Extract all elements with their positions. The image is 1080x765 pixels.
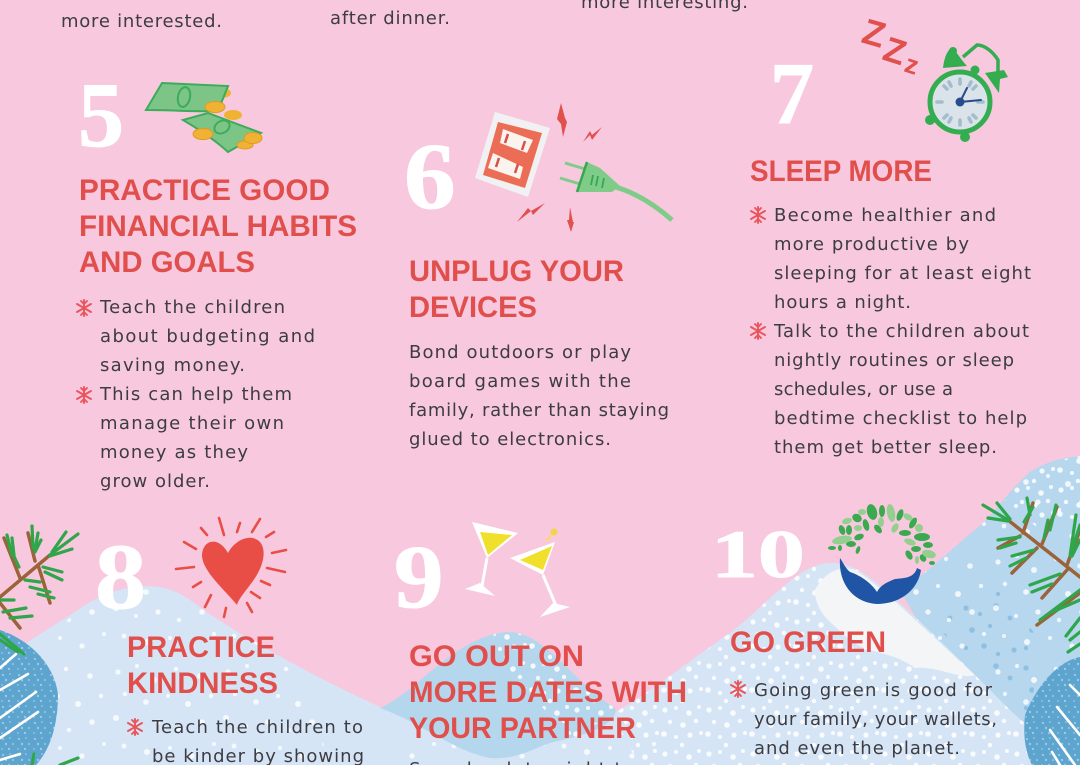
heading: UNPLUG YOUR [409,255,624,288]
bullet list: hours a night. [774,292,911,313]
bullet list: money as they [100,442,248,463]
bullet list: bedtime checklist to help [774,408,1027,429]
bullet list: Become healthier and [774,205,996,226]
heading: PRACTICE [127,631,275,664]
body text [409,342,669,450]
icon: hands and leaves [828,503,937,604]
section 9: dates [394,522,687,765]
hill: light base [0,563,1070,765]
heading: FINANCIAL HABITS [79,210,357,243]
heading [409,255,624,324]
hill: right blue mountain [900,456,1080,765]
body text: Bond outdoors or play [409,342,631,363]
pine branch right [983,498,1080,652]
body text: family, rather than staying [409,400,669,421]
blue dotted blob left [0,630,58,765]
bullet list: and even the planet. [754,738,960,759]
heading: AND GOALS [79,246,255,279]
heading: DEVICES [409,291,537,324]
icon: money and coins [146,83,262,152]
section 10: go green [711,503,997,759]
bullet list: schedules, or use a [774,379,953,400]
number 10: 10 [711,516,805,592]
heading: GO GREEN [730,626,886,659]
heading: SLEEP MORE [750,155,932,188]
body text: glued to electronics. [409,429,611,450]
heading: PRACTICE GOOD [79,174,330,207]
heading: KINDNESS [127,667,278,700]
bullet list: them get better sleep. [774,437,997,458]
bullet list: manage their own [100,413,284,434]
bullet list [751,205,1031,458]
heading: GO OUT ON [409,640,584,673]
blue dotted blob right [1024,657,1080,765]
number 8: 8 [95,526,146,629]
number 7: 7 [770,46,814,143]
bullet list: Going green is good for [754,680,993,701]
hill: center wave [380,630,620,758]
heading [79,174,357,279]
hill: right dots and white peak [618,566,1028,765]
bullet list: grow older. [100,471,210,492]
number 9: 9 [394,528,443,627]
heading: YOUR PARTNER [409,712,636,745]
icon: alarm clock [925,45,1008,142]
number 5: 5 [78,64,124,166]
icon: martini glasses [465,522,570,617]
bullet list: about budgeting and [100,326,315,347]
bullet list [128,717,364,765]
bullet list: more productive by [774,234,969,255]
bullet list: Teach the children to [151,717,363,738]
section 6: unplug devices [404,103,672,450]
icon: socket and plug [475,103,672,232]
section 8: practice kindness [95,518,364,765]
icon: zzz: Z [879,30,911,73]
top text fragments: more interested. [61,11,222,32]
bullet list [77,297,315,492]
top text fragments [61,0,748,32]
heading [127,631,278,700]
section 5: financial habits [77,64,357,492]
bullet list: your family, your wallets, [754,709,997,730]
icon: zzz: z [901,48,923,81]
icon: zzz: Z [858,10,890,56]
bullet list [731,680,997,759]
bullet list: saving money. [100,355,245,376]
top text fragments: after dinner. [330,8,450,29]
body text: board games with the [409,371,631,392]
icon: heart with rays [176,518,286,617]
bullet list: Teach the children [99,297,285,318]
section 7: sleep more [750,10,1031,458]
bullet list: Talk to the children about [773,321,1029,342]
bullet list: sleeping for at least eight [774,263,1031,284]
pine branch left [0,526,78,765]
bullet list: nightly routines or sleep [774,350,1014,371]
bullet list: This can help them [99,384,292,405]
heading: MORE DATES WITH [409,676,687,709]
heading [409,640,687,745]
icon: zzz [858,10,923,81]
number 6: 6 [404,125,456,229]
snowy hills background [0,456,1080,765]
